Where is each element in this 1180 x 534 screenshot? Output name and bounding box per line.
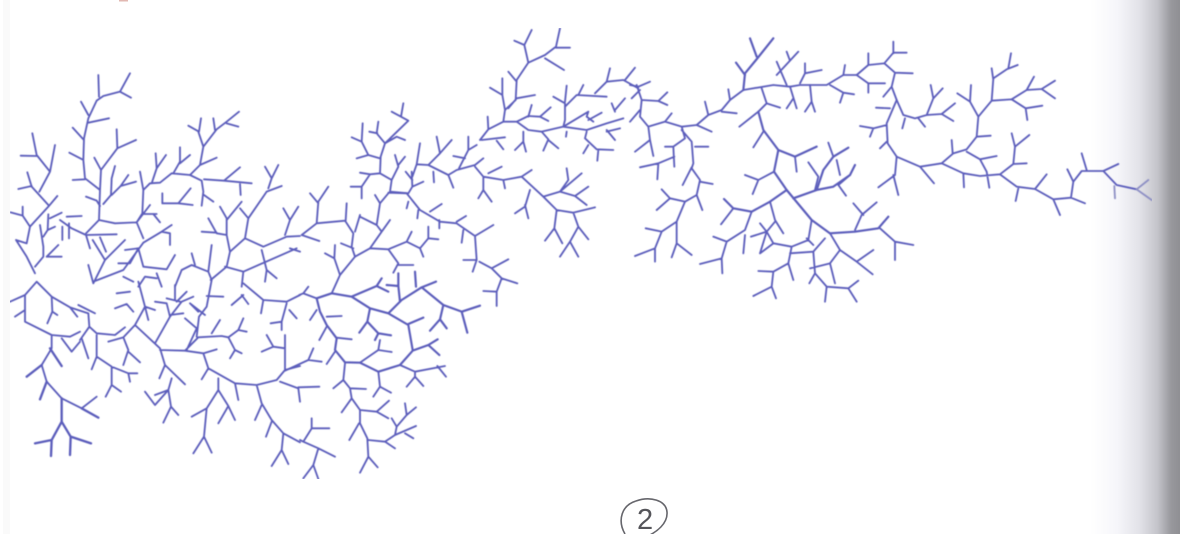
faint left page edge — [3, 0, 10, 534]
middle lower branches — [280, 187, 517, 479]
middle upper branches — [351, 28, 638, 257]
page gutter shadow on the right — [1090, 0, 1180, 534]
left upper branches — [11, 73, 300, 287]
left lower branches — [10, 280, 300, 466]
far right branches — [897, 53, 1152, 215]
right central tree — [630, 38, 913, 302]
circled page number — [621, 499, 667, 534]
cut-off red mark at top edge — [119, 0, 128, 2]
hand-drawn circle — [621, 499, 667, 534]
